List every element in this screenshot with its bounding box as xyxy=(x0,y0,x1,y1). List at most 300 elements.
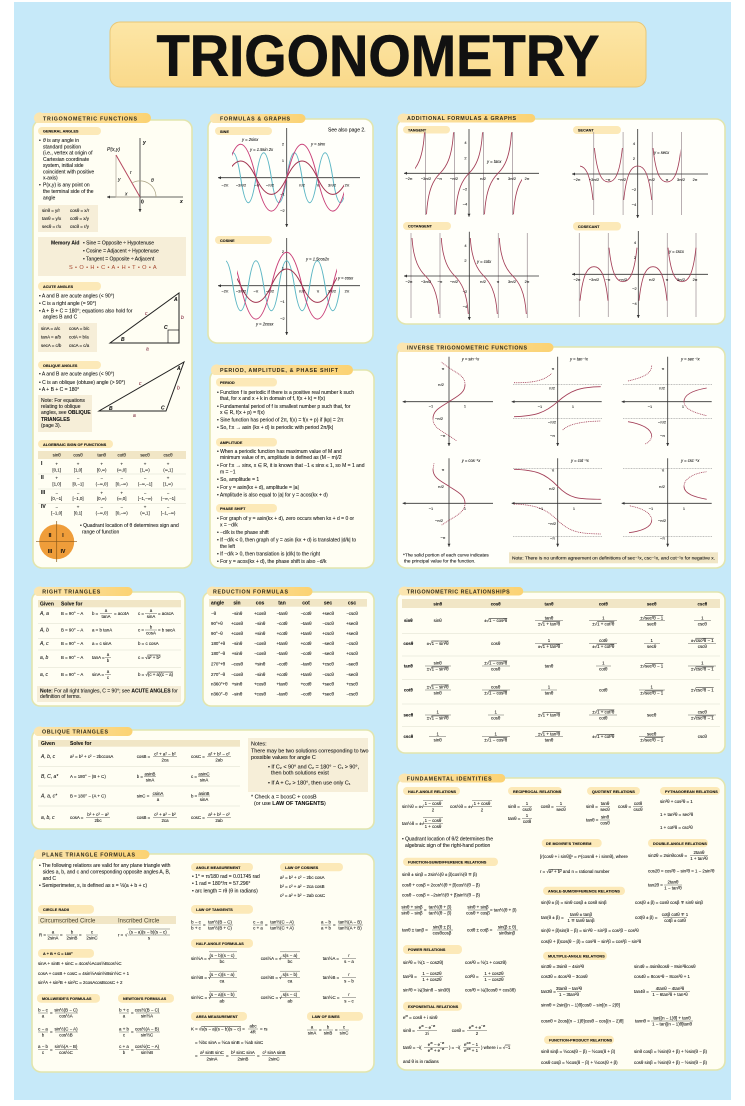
diagram: general angle on axes: y xyxy=(142,140,146,146)
section: half-angle formulas: sin½C = √ xyxy=(191,995,211,1000)
diagram: general angle on axes: x xyxy=(124,192,128,198)
chart: cotangent: y = cotx xyxy=(476,259,492,264)
table: algebraic sign of functions: + xyxy=(100,462,103,466)
section: oblique angles: • A and B are acute angles (< 90°) xyxy=(39,372,115,378)
section: phase shift: • If −d/k > 0, then translation is |d/k| to the right xyxy=(217,552,321,558)
table: trigonometric relationships: 1 xyxy=(436,710,439,715)
section: circle radii: r = xyxy=(118,932,124,938)
chart: cosine: −π/2 xyxy=(266,288,274,294)
chart: inverse tangent: π/2 xyxy=(549,386,555,390)
chart: cosecant: 2π xyxy=(693,277,698,282)
section: angle-sum/difference relations: tan(θ ± β) = xyxy=(541,915,564,920)
section: general angles xyxy=(38,127,101,201)
table: algebraic sign of functions: tanθ xyxy=(97,453,107,458)
section: acute angles: ACUTE ANGLES xyxy=(43,285,74,289)
table: right triangles: B = 90° − A xyxy=(61,655,83,660)
section: circle radii: b xyxy=(71,930,74,935)
chart: tangent: −π/2 xyxy=(450,176,458,181)
section: half-angle formulas: (s − a)(s − b) xyxy=(209,992,235,997)
section: Mollweide's formulas: sin½(B − C) xyxy=(54,1008,78,1012)
section: Newton's formulas: a + b xyxy=(119,1026,130,1032)
chart: tangent: 4 xyxy=(464,140,467,145)
section: circle radii: = xyxy=(60,932,63,938)
section: half-angle formulas: bc xyxy=(288,959,293,964)
section: law of tangents: tan½(A − B) xyxy=(338,920,362,924)
table: oblique triangles: A = 180° − (B + C) xyxy=(70,774,106,779)
section: general angles: system, initial side xyxy=(43,163,84,169)
section: half-angle formulas: r xyxy=(348,953,350,958)
section: exponential relations: sinθ = xyxy=(403,1028,415,1033)
table: oblique triangles: c² + a² − b² xyxy=(154,812,176,817)
chart: sine: −π/2 xyxy=(266,182,274,188)
table: reduction formulas: +sinθ xyxy=(255,631,266,636)
note: oblique triangles: relating to oblique xyxy=(41,404,81,410)
table: trigonometric relationships: ±√1 − cos²θ xyxy=(484,737,508,742)
table: algebraic sign of functions: (∞,1] xyxy=(140,510,150,516)
section: circle radii: (s − a)(s − b)(s − c) xyxy=(129,930,167,935)
table: reduction formulas: 90°+θ xyxy=(211,621,223,626)
chart: inverse cotangent: π/2 xyxy=(549,486,555,491)
diagram: general angle on axes: x xyxy=(179,199,183,205)
general angle formulas: secθ = r/x xyxy=(42,224,62,229)
table: trigonometric relationships: secθ xyxy=(647,712,657,718)
section: function-sum/difference relations: tan½(θ + β) xyxy=(429,904,452,910)
table: right triangles: B = 90° − A xyxy=(61,672,83,677)
chart: sine: π/2 xyxy=(299,182,305,188)
table: algebraic sign of functions: [−1,0] xyxy=(72,496,84,501)
table: oblique triangles: 2ca xyxy=(161,818,169,823)
section: half-angle relations: 1 + cosθ xyxy=(474,801,491,806)
section: circle radii: s xyxy=(148,936,151,941)
table: trigonometric relationships: ±√1 + tan²θ xyxy=(538,622,561,626)
note: inverse definitions: Note: There is no uniform agreement on definitions of sec⁻¹x, csc⁻¹x, and cot⁻¹x for negative x. xyxy=(512,556,715,560)
table: reduction formulas xyxy=(209,599,367,696)
section: angle-sum/difference relations: cos(θ + β)cos(θ − β) = cos²θ − sin²β = cos²β − sin²θ xyxy=(541,939,642,944)
note: oblique triangles: Note: For equations xyxy=(41,398,85,404)
section: area measurement: 4R xyxy=(250,1030,256,1035)
table: reduction formulas: angle xyxy=(211,600,224,606)
table: algebraic sign of functions: + xyxy=(144,504,147,510)
note: right triangles: definition of terms. xyxy=(40,694,81,700)
icon: quadrant circle xyxy=(36,521,77,562)
table: algebraic sign of functions: − xyxy=(55,504,58,510)
note: right triangles xyxy=(37,686,181,702)
section: half-angle formulas: tan½C = xyxy=(323,995,340,1000)
table: reduction formulas: −tanθ xyxy=(300,621,312,626)
table: oblique triangles: a, b, c xyxy=(41,815,55,821)
section: area measurement: = xyxy=(226,1053,229,1058)
table: reduction formulas: +tanθ xyxy=(300,672,312,677)
general angle formulas: cotθ = x/y xyxy=(70,216,90,221)
diagram: oblique triangle: c xyxy=(139,381,142,387)
table: trigonometric relationships: ±√sec²θ − 1 xyxy=(640,737,664,742)
section: multiple-angle relations: 4tanθ − 4tan³θ xyxy=(656,986,685,991)
chart: cotangent: −4 xyxy=(463,304,468,309)
chart: cotangent: −π xyxy=(438,279,443,284)
section: circle radii xyxy=(38,905,176,941)
table: algebraic sign of functions: + xyxy=(77,504,80,510)
table: trigonometric relationships: 1 xyxy=(494,731,497,736)
table: right triangles: = acotA xyxy=(114,611,129,616)
section: function-sum/difference relations: sinθ + sinβ xyxy=(467,904,489,910)
chart: cotangent: −2π xyxy=(405,279,413,284)
table: reduction formulas: +secθ xyxy=(322,611,334,616)
section: Newton's formulas: NEWTON'S FORMULAS xyxy=(123,997,167,1001)
table: right triangles: a xyxy=(107,652,110,657)
section: multiple-angle relations: 1 − 6tan²θ + tan⁴θ xyxy=(652,992,688,997)
table: oblique triangles: asinC xyxy=(198,772,210,776)
section: half-angle formulas: ab xyxy=(220,998,225,1004)
chart: cosine: 2π xyxy=(345,288,350,294)
panel: fundamental identities xyxy=(397,774,725,1070)
section: law of sines: a xyxy=(311,1024,314,1030)
table: reduction formulas: +cscθ xyxy=(322,631,334,636)
table: algebraic sign of functions: + xyxy=(55,476,58,480)
section: Newton's formulas: sin½B xyxy=(141,1050,153,1055)
notes: oblique triangles xyxy=(248,738,368,792)
section: law of sines: LAW OF SINES xyxy=(312,1015,340,1019)
table: algebraic sign of functions: − xyxy=(55,490,58,496)
table: trigonometric relationships: ±√1 − sin²θ xyxy=(427,685,449,690)
table: reduction formulas: −cosθ xyxy=(254,641,266,646)
table: trigonometric relationships: ±√1 + cot²θ xyxy=(592,734,615,739)
section: law of cosines: c² = a² + b² − 2ab cosC xyxy=(280,893,325,898)
table: reduction formulas: +cotθ xyxy=(301,682,312,686)
chart: sine: −3π/2 xyxy=(236,182,246,188)
section: pythagorean relations xyxy=(660,787,720,830)
table: right triangles: = b secA xyxy=(158,628,175,632)
chart: cotangent: 2 xyxy=(464,258,467,263)
section: circle radii: 2sinA xyxy=(48,936,59,941)
table: algebraic sign of functions: ALGEBRAIC SIGN OF FUNCTIONS xyxy=(43,443,107,447)
table: algebraic sign of functions: IV xyxy=(41,504,46,510)
table: reduction formulas: −cotθ xyxy=(277,662,288,666)
chart: cosecant: −π/2 xyxy=(619,277,627,282)
table: reduction formulas: −cosθ xyxy=(231,672,243,677)
section: Mollweide's formulas: cos½A xyxy=(59,1014,73,1018)
table: algebraic sign of functions: (∞,1] xyxy=(163,468,173,472)
chart: sine: 2 xyxy=(282,142,284,146)
section: reciprocal relations: tanθ = xyxy=(508,816,521,821)
table: algebraic sign of functions: II xyxy=(41,475,44,481)
section: multiple-angle relations: cos4θ = 8cos⁴θ − 8cos²θ + 1 xyxy=(634,974,691,979)
chart: inverse cosecant: −π xyxy=(660,536,665,540)
table: algebraic sign of functions: [1,∞) xyxy=(163,482,173,486)
table: trigonometric relationships: 1 xyxy=(650,685,653,690)
section: general angles: Cartesian coordinate xyxy=(43,157,89,163)
table: trigonometric relationships: 1 xyxy=(548,638,551,643)
section: exponential relations: ) where i = √−1 xyxy=(481,1045,511,1050)
table: reduction formulas: −sinθ xyxy=(232,641,243,646)
table: trigonometric relationships: 1 xyxy=(602,616,605,620)
chart: secant: −π xyxy=(606,177,611,182)
memory aid: • Cosine = Adjacent ÷ Hypotenuse xyxy=(83,249,159,255)
table: oblique triangles: sinA xyxy=(200,778,208,782)
section: phase shift: • −d/k is the phase shift xyxy=(217,530,269,536)
section: circle radii: 2sinC xyxy=(86,936,98,941)
section: exponential relations: and θ is in radians xyxy=(403,1059,439,1064)
table: trigonometric relationships: 1 xyxy=(436,731,439,736)
table: trigonometric relationships: cscθ xyxy=(698,622,707,626)
section: law of sines: = xyxy=(319,1028,322,1032)
section: acute angles: • C is a right angle (= 90°) xyxy=(39,301,97,307)
section: amplitude: m = −1 xyxy=(220,470,236,476)
table: algebraic sign of functions: (−∞,0] xyxy=(96,510,108,516)
chart: cosecant: 2 xyxy=(634,255,636,260)
table: algebraic sign of functions: [0,1] xyxy=(52,468,61,472)
section: half-angle formulas: bc xyxy=(220,959,225,964)
table: right triangles: A, b xyxy=(39,628,49,634)
table: trigonometric relationships: sinθ xyxy=(434,691,442,696)
section: half-angle formulas: r xyxy=(348,992,350,997)
table: trigonometric relationships: tanθ xyxy=(545,616,554,620)
note: oblique triangles: (page 3). xyxy=(41,423,61,429)
section: law of sines: c xyxy=(343,1024,346,1030)
section: oblique angles xyxy=(38,361,125,393)
chart: cosecant xyxy=(572,222,708,318)
table: reduction formulas: −secθ xyxy=(322,641,334,646)
table: right triangles: a xyxy=(150,608,153,613)
heading: additional formulas and graphs: ADDITIONAL FORMULAS & GRAPHS xyxy=(407,116,516,122)
section: area measurement: c² sinA sinB xyxy=(263,1050,286,1055)
section: general angles: θ is any angle in xyxy=(43,138,79,144)
heading: trigonometric relationships xyxy=(399,587,523,596)
table: reduction formulas: +cosθ xyxy=(231,621,243,626)
section: multiple-angle relations xyxy=(541,952,696,1026)
chart: secant xyxy=(565,126,708,218)
section: general angles: x-axis) xyxy=(43,176,58,182)
section: period: • So, f:x → asin (kx + d) is periodic with period 2π/|k| xyxy=(217,425,333,431)
chart: inverse cotangent: −π/2 xyxy=(548,521,556,526)
heading: trigonometric functions: TRIGONOMETRIC FUNCTIONS xyxy=(43,116,137,122)
section: circle radii: √ xyxy=(125,932,128,938)
section: general angles: standard position xyxy=(43,144,81,150)
chart: cosine: y = cosx xyxy=(337,276,354,280)
section: exponential relations: tanθ = −i( xyxy=(403,1045,422,1050)
heading: oblique triangles xyxy=(34,726,132,736)
section: half-angle formulas: ab xyxy=(288,998,293,1004)
section: power relations: 1 + cos2θ xyxy=(484,971,504,976)
table: algebraic sign of functions: [0,−1] xyxy=(72,482,84,486)
table: oblique triangles: 2ab xyxy=(215,818,223,823)
table: right triangles: c = xyxy=(138,611,144,616)
chart: inverse tangent: π xyxy=(552,366,555,371)
section: Newton's formulas: = xyxy=(131,1010,134,1016)
section: phase shift: • For y = acos(kx + d), the phase shift is also −d/k xyxy=(217,559,327,565)
section: acute angles: angles B and C xyxy=(43,315,78,321)
diagram: right triangle: A xyxy=(173,297,178,303)
table: oblique triangles: cosB = xyxy=(137,815,151,820)
table: trigonometric relationships: secθ xyxy=(647,602,657,606)
general angle formulas: tanθ = y/x xyxy=(42,216,62,221)
section: circle radii: a xyxy=(52,930,55,935)
section: half-angle formulas: r xyxy=(348,972,350,977)
table: trigonometric relationships: cotθ xyxy=(404,688,413,692)
section: function-sum/difference relations: sinθsinβ xyxy=(499,930,516,936)
table: trigonometric relationships: cotθ xyxy=(599,638,608,643)
section: law of tangents: tan½(C + A) xyxy=(270,926,294,930)
chart: inverse secant: π/2 xyxy=(659,386,665,390)
section: amplitude: • For f:x → sinx, x ∈ R, it is known that −1 ≤ sinx ≤ 1, so M = 1 and xyxy=(217,463,365,469)
chart: inverse sine: π/2 xyxy=(438,382,444,387)
section: area measurement: 2sinB xyxy=(238,1056,249,1062)
table: reduction formulas: +cosθ xyxy=(254,692,266,696)
general angle formulas: cosθ = x/r xyxy=(70,208,90,213)
section: half-angle formulas: HALF-ANGLE FORMULAS xyxy=(196,942,244,946)
table: right triangles: a xyxy=(105,608,108,613)
chart: sine: See also page 2. xyxy=(328,128,366,134)
table: algebraic sign of functions: − xyxy=(77,490,80,496)
table: algebraic sign of functions: I xyxy=(41,461,43,467)
table: trigonometric relationships: ±√1 + cot²θ xyxy=(592,622,615,626)
section: law of tangents: c + a xyxy=(253,926,263,930)
section: power relations: 1 − cos2θ xyxy=(422,971,442,976)
table: reduction formulas: −cscθ xyxy=(346,611,358,616)
section: multiple-angle relations: tan[(n − 1)θ] + tanθ xyxy=(653,1016,691,1020)
section: half-angle relations: 1 − cosθ xyxy=(425,801,442,806)
chart: cosecant: −2π xyxy=(573,277,581,282)
memory aid: • Tangent = Opposite ÷ Adjacent xyxy=(83,257,155,263)
chart: cosecant: −3π/2 xyxy=(589,277,599,282)
heading: plane triangle formulas xyxy=(34,849,150,859)
section: law of tangents: a − b xyxy=(321,920,332,924)
section: multiple-angle relations: cosnθ = 2cos[(n − 1)θ]cosθ − cos[(n − 2)θ] xyxy=(541,1018,624,1024)
table: algebraic sign of functions: sinθ xyxy=(53,453,61,458)
table: right triangles: B = 90° − A xyxy=(61,611,83,616)
table: algebraic sign of functions: + xyxy=(120,462,123,466)
section: Mollweide's formulas: = xyxy=(50,1047,53,1052)
section: circle radii: 2sinB xyxy=(67,936,78,941)
section: law of tangents: = xyxy=(265,922,268,928)
table: reduction formulas: n360°−θ xyxy=(211,692,228,696)
section: exponential relations: 2i xyxy=(425,1031,429,1036)
table: trigonometric relationships: ±√1 − cos²θ xyxy=(484,618,508,623)
footnote: check: * Check a = bcosC + ccosB xyxy=(251,794,317,800)
chart: inverse tangent: y = tan⁻¹x xyxy=(569,356,589,362)
chart: sine xyxy=(215,127,366,227)
section: circle radii: = xyxy=(79,932,82,938)
table: algebraic sign of functions: − xyxy=(167,504,170,510)
table: trigonometric relationships: tanθ xyxy=(404,664,413,668)
table: reduction formulas: csc xyxy=(348,600,356,606)
section: half-angle formulas: tan½A = xyxy=(323,956,339,961)
section: Mollweide's formulas: sin½(A − B) xyxy=(55,1044,78,1049)
chart: cosecant: π xyxy=(666,277,669,282)
section: double-angle relations: DOUBLE-ANGLE RELATIONS xyxy=(653,842,707,846)
diagram: right triangle: B xyxy=(121,337,125,343)
section: Newton's formulas: sin½A xyxy=(141,1014,153,1018)
table: trigonometric relationships: 1 xyxy=(548,685,551,690)
chart: tangent: −2π xyxy=(405,176,413,181)
section: reciprocal relations: cscθ xyxy=(522,807,532,812)
table: algebraic sign of functions: cscθ xyxy=(163,453,173,458)
table: reduction formulas: −secθ xyxy=(346,662,358,666)
section: function-sum/difference relations: tanθ ± tanβ = xyxy=(402,928,428,932)
section: pythagorean relations: 1 + cot²θ = csc²θ xyxy=(660,825,693,830)
section: area measurement: = ½bc sinA = ½ca sinB = ½ab sinC xyxy=(195,1040,263,1045)
table: right triangles: Solve for xyxy=(61,602,82,608)
table: algebraic sign of functions: (−∞,−1] xyxy=(138,482,152,486)
table: reduction formulas: −sinθ xyxy=(232,692,243,696)
table: reduction formulas: +cscθ xyxy=(322,662,334,666)
table: trigonometric relationships: ±√1 + cot²θ xyxy=(592,710,615,715)
chart: inverse sine: 1 xyxy=(464,404,466,408)
table: oblique triangles: cosA = xyxy=(70,815,84,820)
table: reduction formulas: −cotθ xyxy=(277,621,288,626)
section: law of cosines xyxy=(280,863,343,898)
table: right triangles: b = c cosA xyxy=(138,641,159,646)
table: trigonometric relationships: cosθ xyxy=(403,641,414,646)
section: area measurement: = rs xyxy=(260,1026,268,1032)
chart: inverse tangent: −1 xyxy=(538,404,542,409)
table: algebraic sign of functions: [−1,−∞) xyxy=(161,510,176,516)
section: acute angles: secA = c/b xyxy=(41,343,62,348)
section: multiple-angle relations: 1 − tan[(n − 1)θ]tanθ xyxy=(652,1022,692,1026)
section: area measurement: K = √s(s − a)(s − b)(s − c) = xyxy=(191,1026,245,1032)
table: algebraic sign of functions: [0,∞) xyxy=(97,496,107,501)
section: Newton's formulas xyxy=(118,994,174,1055)
notes: oblique triangles: • If C₂ < 90° and C₂ = 180° − C₁ > 90°, xyxy=(268,764,360,770)
diagram: oblique triangle: A xyxy=(176,366,181,372)
section: multiple-angle relations: tan3θ = xyxy=(541,989,556,994)
table: trigonometric relationships: tanθ xyxy=(545,664,554,668)
section: Mollweide's formulas: MOLLWEIDE'S FORMULAS xyxy=(42,997,92,1001)
table: trigonometric relationships: cscθ xyxy=(697,602,708,606)
section: amplitude: AMPLITUDE xyxy=(220,441,243,445)
chart: inverse cosine: π xyxy=(442,467,445,472)
chart: cosecant: 3π/2 xyxy=(677,277,685,282)
section: half-angle formulas: s − b xyxy=(344,978,354,984)
chart: tangent: 2π xyxy=(525,176,530,181)
section: reciprocal relations: 1 xyxy=(526,801,529,806)
chart: tangent: TANGENT xyxy=(408,128,427,132)
section: half-angle formulas: s − a xyxy=(344,959,354,964)
table: algebraic sign of functions: (∞,0] xyxy=(117,496,126,501)
section: half-angle formulas: tan½B = xyxy=(323,975,340,980)
table: oblique triangles: cosC = xyxy=(191,815,205,820)
table: algebraic sign of functions: − xyxy=(144,490,147,496)
section: function-sum/difference relations: cotθ ± cotβ = xyxy=(467,928,493,932)
chart: sine: π xyxy=(317,182,320,188)
notes: oblique triangles: then both solutions exist xyxy=(271,770,329,776)
section: A+B+C=180: cosA + cosB + cosC = 4sin½Asin½Bsin½C + 1 xyxy=(38,971,130,976)
section: function-product relations: sinθ sinβ = ½cos(θ − β) − ½cos(θ + β) xyxy=(541,1049,616,1054)
table: trigonometric relationships: cotθ xyxy=(599,716,608,721)
table: reduction formulas: +sinθ xyxy=(232,682,243,686)
section: exponential relations: e2iθ + 1 xyxy=(464,1047,479,1053)
section: period: • Function f is periodic if there is a positive real number k such xyxy=(217,390,354,396)
section: Mollweide's formulas: a − b xyxy=(38,1044,49,1049)
table: trigonometric relationships: tanθ xyxy=(545,602,554,606)
chart: secant: −2π xyxy=(573,177,581,182)
chart: cosecant: −4 xyxy=(632,301,638,306)
footnote: solid portion: the principal value for the function. xyxy=(404,558,475,564)
table: reduction formulas: cot xyxy=(302,600,310,606)
section: general angles: angle xyxy=(43,195,55,201)
section: Mollweide's formulas: = xyxy=(50,1030,53,1034)
section: double-angle relations: cos2θ = cos²θ − sin²θ = 1 − 2sin²θ xyxy=(648,868,715,874)
section: law of tangents: LAW OF TANGENTS xyxy=(196,908,233,912)
section: multiple-angle relations: sin3θ = 3sinθ − 4sin³θ xyxy=(541,964,585,969)
table: trigonometric relationships: 1 xyxy=(701,661,704,666)
section: quotient relations: secθ xyxy=(600,807,610,812)
table: reduction formulas: +tanθ xyxy=(276,682,288,686)
section: half-angle formulas: s(s − a) xyxy=(283,953,298,958)
section: general angles: (i.e., vertex at origin of xyxy=(43,150,93,156)
table: algebraic sign of functions: − xyxy=(120,476,123,480)
notes: oblique triangles: possible values for angle C xyxy=(251,755,316,761)
section: half-angle relations: 2 xyxy=(481,808,484,812)
